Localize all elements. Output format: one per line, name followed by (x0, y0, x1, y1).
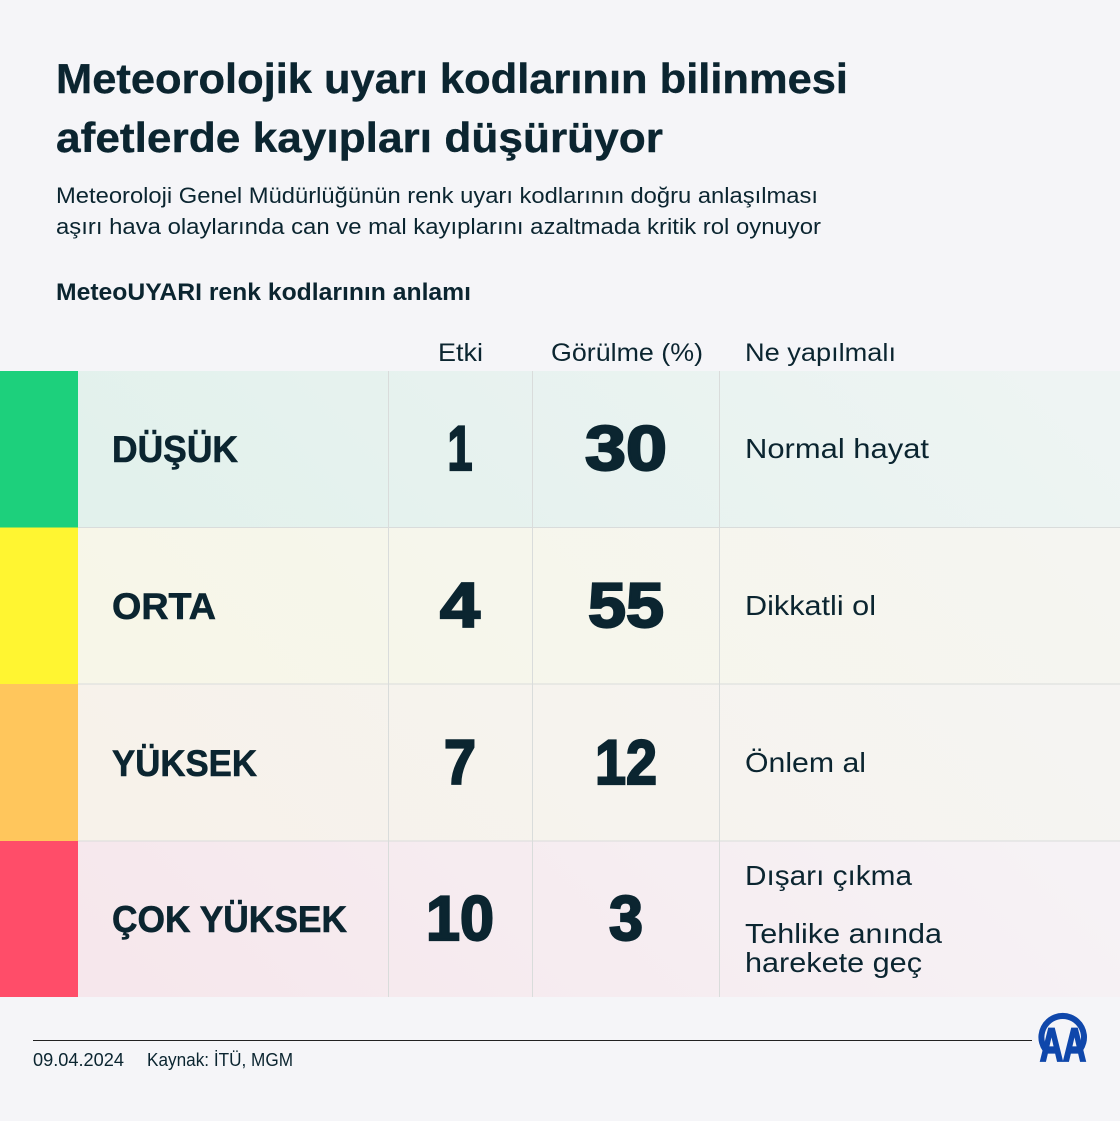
subtitle: aşırı hava olaylarında can ve mal kayıplarını azaltmada kritik rol oynuyor (56, 214, 822, 239)
row: çok yüksek (0, 841, 1120, 997)
subtitle (56, 183, 822, 239)
level: yüksek: YÜKSEK (112, 743, 257, 784)
row: yüksek (0, 684, 1120, 841)
row: orta (0, 528, 1120, 684)
level: orta: ORTA (112, 586, 216, 627)
color swatch: red (0, 841, 78, 997)
impact: 4: 4 (440, 571, 480, 641)
title: Meteorolojik uyarı kodlarının bilinmesi (56, 55, 848, 102)
column headers: Görülme (%) (551, 339, 703, 367)
action: dikkatli ol: Dikkatli ol (745, 590, 876, 621)
action: dışarı çıkma, tehlike anında harekete geç (745, 860, 942, 978)
frequency: 3: 3 (609, 884, 643, 954)
icon: AA logo: AA (1040, 1018, 1086, 1070)
action: dışarı çıkma, tehlike anında harekete geç: harekete geç (745, 947, 922, 978)
action: önlem al: Önlem al (745, 747, 866, 778)
footer rule (33, 1040, 1032, 1041)
section heading: MeteoUYARI renk kodlarının anlamı (56, 279, 471, 306)
column headers: Etki (438, 339, 483, 367)
level: düşük: DÜŞÜK (112, 429, 238, 470)
level: çok yüksek: ÇOK YÜKSEK (112, 899, 347, 940)
column headers (438, 339, 896, 367)
color swatch: yellow (0, 528, 78, 684)
action: normal hayat: Normal hayat (745, 433, 929, 464)
row: düşük (0, 371, 1120, 528)
impact: 1: 1 (448, 414, 472, 484)
action: dışarı çıkma, tehlike anında harekete geç: Dışarı çıkma (745, 860, 912, 891)
impact: 10: 10 (426, 884, 494, 954)
color swatch: orange (0, 684, 78, 841)
footer: date and source: 09.04.2024 (33, 1050, 124, 1070)
impact: 7: 7 (444, 728, 476, 798)
icon: AA logo (1038, 1013, 1087, 1070)
color swatch: green (0, 371, 78, 528)
frequency: 12: 12 (595, 728, 657, 798)
column headers: Ne yapılmalı (745, 339, 896, 367)
title (56, 55, 848, 161)
action: dışarı çıkma, tehlike anında harekete geç: Tehlike anında (745, 918, 942, 949)
subtitle: Meteoroloji Genel Müdürlüğünün renk uyarı kodlarının doğru anlaşılması (56, 183, 818, 208)
frequency: 30: 30 (585, 414, 667, 484)
footer: date and source: Kaynak: İTÜ, MGM (147, 1050, 293, 1070)
title: afetlerde kayıpları düşürüyor (56, 114, 663, 161)
footer: date and source (33, 1050, 293, 1070)
frequency: 55: 55 (588, 571, 664, 641)
